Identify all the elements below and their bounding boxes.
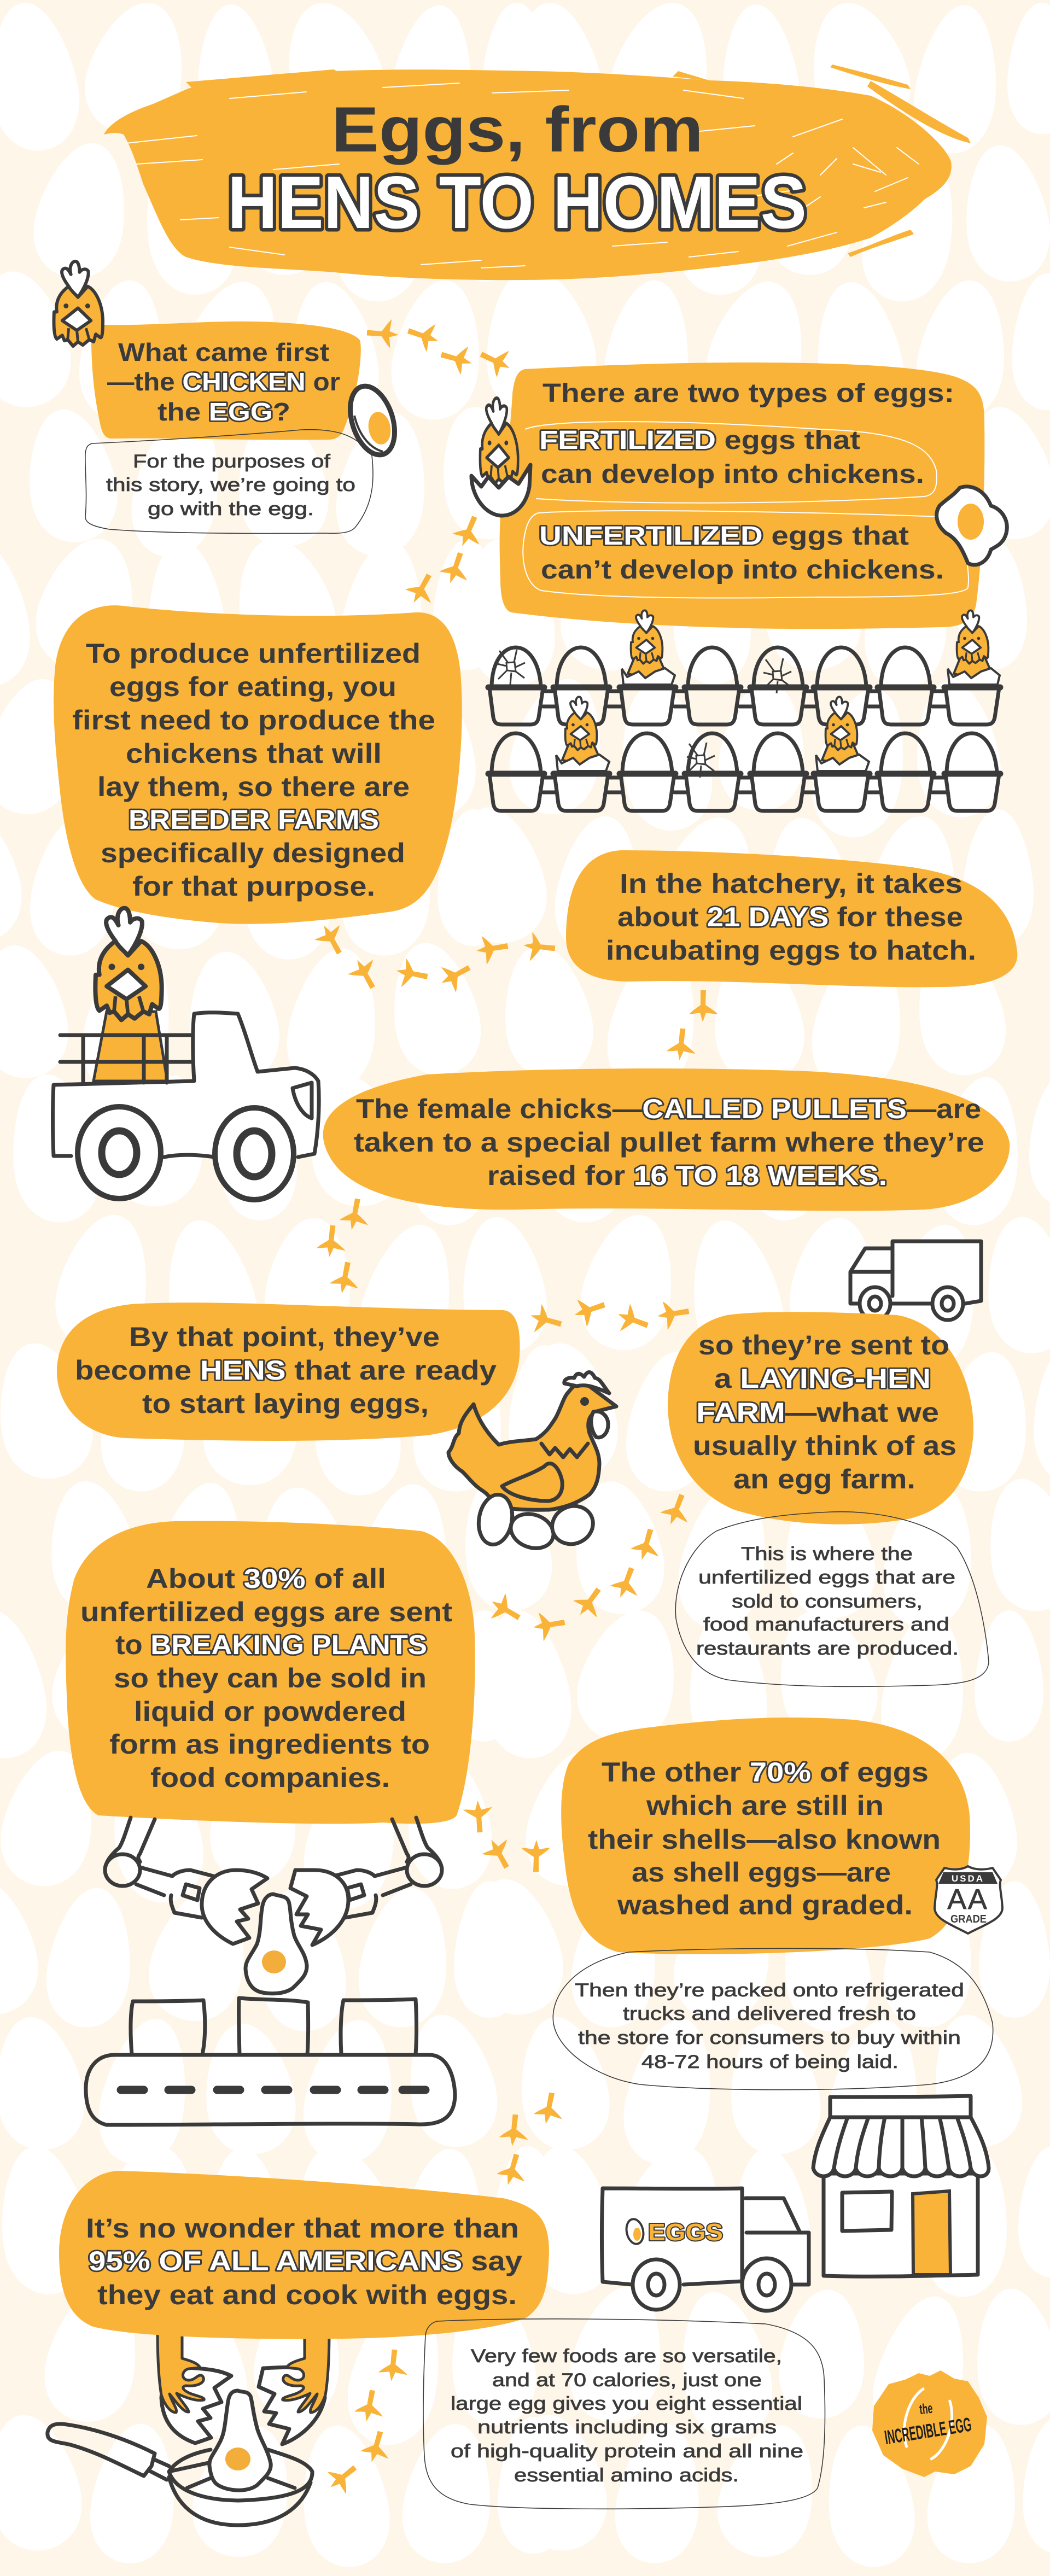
text: laying-hen farm: usually think of as [693, 1430, 956, 1461]
panel: hatchery [566, 850, 1017, 987]
illustration: eggs delivery truck: EGGS [648, 2219, 723, 2246]
text: 95 percent of americans: It’s no wonder that more than [86, 2213, 519, 2244]
callout: nutrition facts: Very few foods are so versatile, [471, 2346, 782, 2367]
text: pullets [354, 1094, 984, 1191]
text: hatchery: incubating eggs to hatch. [606, 935, 976, 966]
icon: fried egg [937, 487, 1007, 565]
footprints: tenth trail [322, 2349, 409, 2499]
icon: small delivery truck [850, 1241, 981, 1320]
callout: this is where: restaurants are produced. [696, 1638, 959, 1659]
text: breaking plants: so they can be sold in [114, 1663, 427, 1693]
title brush stroke [104, 65, 971, 280]
text: pullets: raised for 16 TO 18 WEEKS. [487, 1160, 887, 1191]
text: shell eggs: washed and graded. [617, 1890, 913, 1920]
icon: USDA AA grade shield [935, 1866, 1002, 1934]
box: fertilized eggs [525, 422, 937, 503]
text: 95 percent of americans: 95% OF ALL AMERICANS say [89, 2246, 522, 2276]
footprints: second trail [401, 511, 488, 610]
text: pullets: The female chicks— CALLED PULLETS —are [356, 1094, 981, 1124]
text: what came first: —the CHICKEN or [107, 367, 340, 396]
text: shell eggs: as shell eggs—are [632, 1857, 891, 1888]
icon: chick head [54, 261, 103, 346]
icon: chick hatching from shell [471, 398, 530, 516]
text: breeder farms: specifically designed [101, 838, 405, 868]
text: what came first [107, 338, 340, 426]
callout: refrigerated trucks [553, 1948, 993, 2090]
text: shell eggs [588, 1757, 941, 1920]
callout: this is where: sold to consumers, [732, 1591, 923, 1612]
text: laying-hen farm: a LAYING-HEN [714, 1363, 931, 1394]
callout: this is where: This is where the [741, 1544, 913, 1564]
illustration: pickup truck with chicken [52, 908, 319, 1200]
callout: this is where: unfertilized eggs that are [698, 1567, 955, 1588]
footprints: sixth trail [527, 1292, 691, 1339]
text: breeder farms: for that purpose. [132, 871, 375, 902]
text: breeder farms: chickens that will [126, 738, 382, 769]
callout: refrigerated trucks: Then they’re packed onto refrigerated [575, 1980, 964, 2001]
callout: refrigerated trucks: 48-72 hours of being laid. [641, 2052, 899, 2072]
title [228, 94, 807, 244]
text: breeder farms [72, 638, 435, 902]
callout: this is where: food manufacturers and [703, 1614, 949, 1635]
text: 95 percent of americans: they eat and cook with eggs. [97, 2280, 517, 2310]
logo: the incredible egg: INCREDIBLE EGG [883, 2413, 973, 2449]
callout: for the purposes [85, 430, 373, 533]
callout: this is where [675, 1512, 989, 1686]
callout: for the purposes: go with the egg. [148, 499, 314, 519]
text: laying-hen farm: so they’re sent to [698, 1330, 949, 1360]
title: Eggs, from [331, 94, 703, 165]
panel: breeder farms [54, 605, 462, 924]
callout: nutrition facts: of high-quality protein and all nine [451, 2441, 803, 2462]
text: breaking plants [80, 1563, 452, 1793]
panel: 95 percent of americans [59, 2171, 549, 2339]
footprints: seventh trail [484, 1490, 696, 1643]
callout: for the purposes: this story, we’re going to [106, 475, 355, 495]
callout: refrigerated trucks: trucks and delivered fresh to [623, 2003, 916, 2024]
text: hatchery [606, 868, 976, 966]
footprints: ninth trail [494, 2090, 567, 2189]
panel: hens [57, 1302, 520, 1441]
callout: refrigerated trucks: the store for consumers to buy within [578, 2028, 961, 2048]
panel: pullets [323, 1068, 1010, 1211]
text: breaking plants: form as ingredients to [109, 1729, 430, 1760]
footprints: third trail [311, 919, 556, 996]
text: what came first: What came first [118, 338, 329, 366]
text: 95 percent of americans [86, 2213, 522, 2310]
text: hatchery: In the hatchery, it takes [620, 868, 962, 899]
logo: the incredible egg [872, 2370, 987, 2477]
text: breeder farms: To produce unfertilized [86, 638, 421, 669]
panel: what came first [91, 322, 361, 440]
text: breaking plants: liquid or powdered [134, 1696, 406, 1727]
panel: laying-hen farm [668, 1312, 973, 1524]
box: unfertilized eggs: UNFERTILIZED eggs that [539, 522, 909, 551]
text: laying-hen farm [693, 1330, 956, 1494]
text: hatchery: about 21 DAYS for these [617, 902, 963, 932]
box: unfertilized eggs [523, 511, 969, 598]
text: two types heading: There are two types of eggs: [542, 379, 954, 408]
text: pullets: taken to a special pullet farm where they’re [354, 1127, 984, 1158]
footprints: first trail [366, 317, 516, 381]
callout: nutrition facts: and at 70 calories, just one [492, 2370, 762, 2391]
callout: nutrition facts: large egg gives you eight essential [451, 2393, 802, 2414]
illustration: egg cartons with hatching chicks [488, 610, 1000, 811]
footprints: eighth trail [463, 1800, 550, 1875]
box: unfertilized eggs: can’t develop into chickens. [541, 556, 944, 585]
text: breeder farms: BREEDER FARMS [129, 804, 379, 835]
text: laying-hen farm: an egg farm. [733, 1464, 915, 1494]
text: breaking plants: unfertilized eggs are sent [80, 1597, 452, 1627]
illustration: hands cracking egg over pan [48, 2330, 329, 2525]
icon: halved egg [342, 381, 402, 460]
box: fertilized eggs: can develop into chickens. [541, 460, 924, 489]
illustration: robot arms breaking egg [86, 1818, 455, 2125]
callout: nutrition facts: essential amino acids. [514, 2465, 739, 2486]
footprints: fifth trail [316, 1196, 372, 1296]
icon: USDA AA grade shield: AA [947, 1884, 989, 1915]
callout: for the purposes: For the purposes of [133, 451, 331, 472]
panel: two types of eggs [500, 363, 984, 629]
text: hens: to start laying eggs, [142, 1388, 429, 1419]
title: HENS TO HOMES [228, 161, 807, 244]
panel: breaking plants [66, 1521, 475, 1824]
text: hens: become HENS that are ready [75, 1355, 497, 1386]
callout: nutrition facts: nutrients including six grams [477, 2417, 777, 2438]
text: what came first: the EGG ? [158, 398, 290, 426]
box: fertilized eggs: FERTILIZED eggs that [539, 426, 860, 455]
illustration: hen on eggs [448, 1372, 616, 1554]
text: shell eggs: The other 70% of eggs [602, 1757, 929, 1788]
icon: USDA AA grade shield: USDA [952, 1873, 984, 1884]
icon: USDA AA grade shield: GRADE [950, 1913, 987, 1925]
text: hens: By that point, they’ve [129, 1322, 440, 1352]
text: breaking plants: to BREAKING PLANTS [115, 1629, 427, 1660]
text: shell eggs: which are still in [646, 1790, 884, 1821]
footprints: fourth trail [666, 990, 718, 1061]
text: breeder farms: lay them, so there are [97, 772, 410, 802]
text: shell eggs: their shells—also known [588, 1824, 941, 1855]
callout: nutrition facts [423, 2319, 825, 2509]
panel: shell eggs [561, 1718, 970, 1954]
text: breaking plants: About 30% of all [146, 1563, 386, 1594]
text: hens [75, 1322, 497, 1419]
text: laying-hen farm: FARM —what we [696, 1397, 939, 1428]
illustration: eggs delivery truck [602, 2188, 809, 2311]
text: breeder farms: first need to produce the [72, 705, 435, 735]
logo: the incredible egg: the [919, 2400, 934, 2417]
text: breaking plants: food companies. [150, 1762, 390, 1793]
illustration: store [813, 2096, 989, 2276]
text: breeder farms: eggs for eating, you [109, 671, 396, 702]
